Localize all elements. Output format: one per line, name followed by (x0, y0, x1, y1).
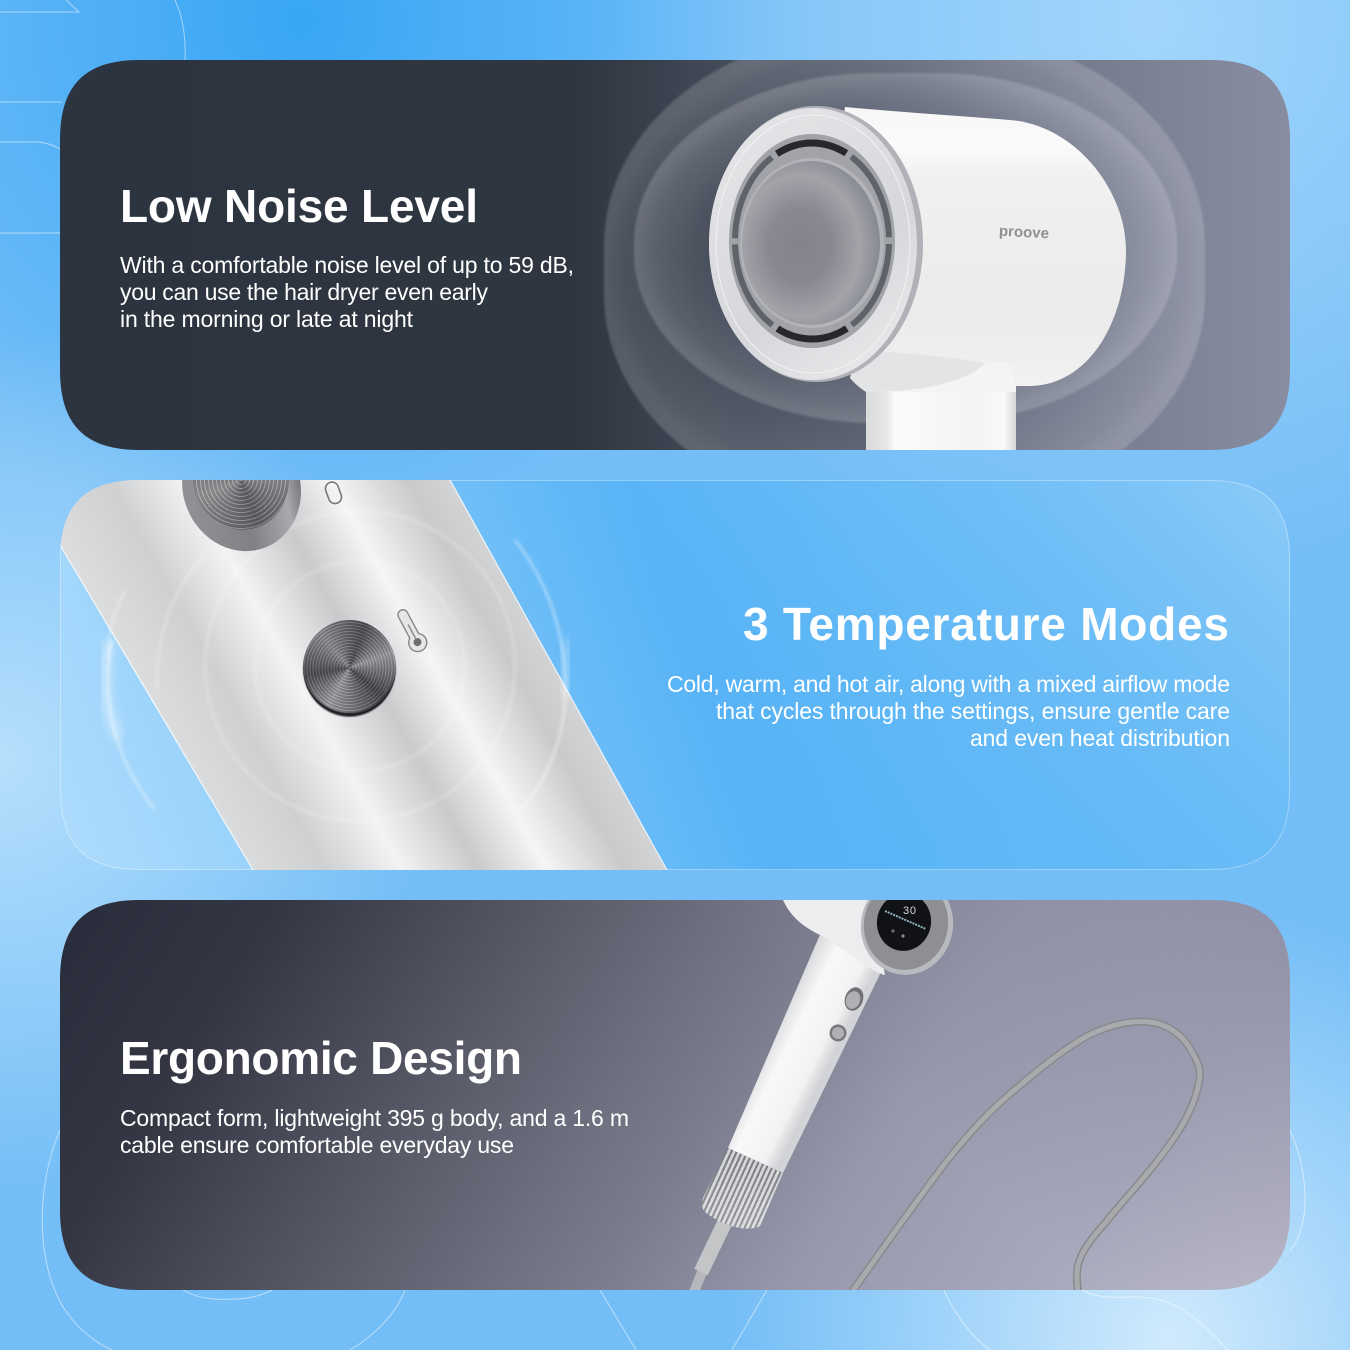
description: low noise (120, 252, 574, 332)
description: temperature: Cold, warm, and hot air, along with a mixed airflow mode (667, 671, 1230, 697)
description: temperature (667, 671, 1230, 751)
thermometer icon (397, 609, 428, 652)
panel: temperature modes (40, 480, 1290, 870)
panel: ergonomic design (60, 867, 1290, 1292)
heading: Low Noise Level (120, 180, 478, 232)
description: ergonomic (120, 1105, 629, 1158)
panel 2 heading: 3 Temperature Modes (743, 598, 1229, 650)
dryer head (780, 895, 885, 975)
control buttons (830, 987, 864, 1042)
description: low noise: you can use the hair dryer even early (120, 279, 488, 305)
description: temperature: that cycles through the settings, ensure gentle care (716, 698, 1230, 724)
description: low noise: in the morning or late at night (120, 306, 414, 332)
brand label: proove (999, 223, 1049, 242)
hair dryer head illustration (709, 106, 1126, 452)
display reading: 30 (903, 905, 916, 917)
power cable (852, 1022, 1200, 1292)
description: low noise: With a comfortable noise level of up to 59 dB, (120, 252, 574, 278)
button outline icon (324, 481, 342, 504)
filter cap (702, 1148, 783, 1229)
dryer handle (728, 930, 882, 1173)
description: temperature: and even heat distribution (970, 725, 1230, 751)
heading: Ergonomic Design (120, 1032, 522, 1084)
icon: temperature knob (303, 620, 396, 716)
description: ergonomic: Compact form, lightweight 395 g body, and a 1.6 m (120, 1105, 629, 1131)
icon: upper knob (182, 480, 301, 552)
sound wave rings (603, 60, 1206, 450)
sound wave arcs (106, 538, 568, 811)
description: ergonomic: cable ensure comfortable everyday use (120, 1132, 514, 1158)
tail cable (690, 1270, 706, 1290)
panel: low noise level (60, 60, 1290, 450)
dryer handle close-up (40, 480, 667, 870)
